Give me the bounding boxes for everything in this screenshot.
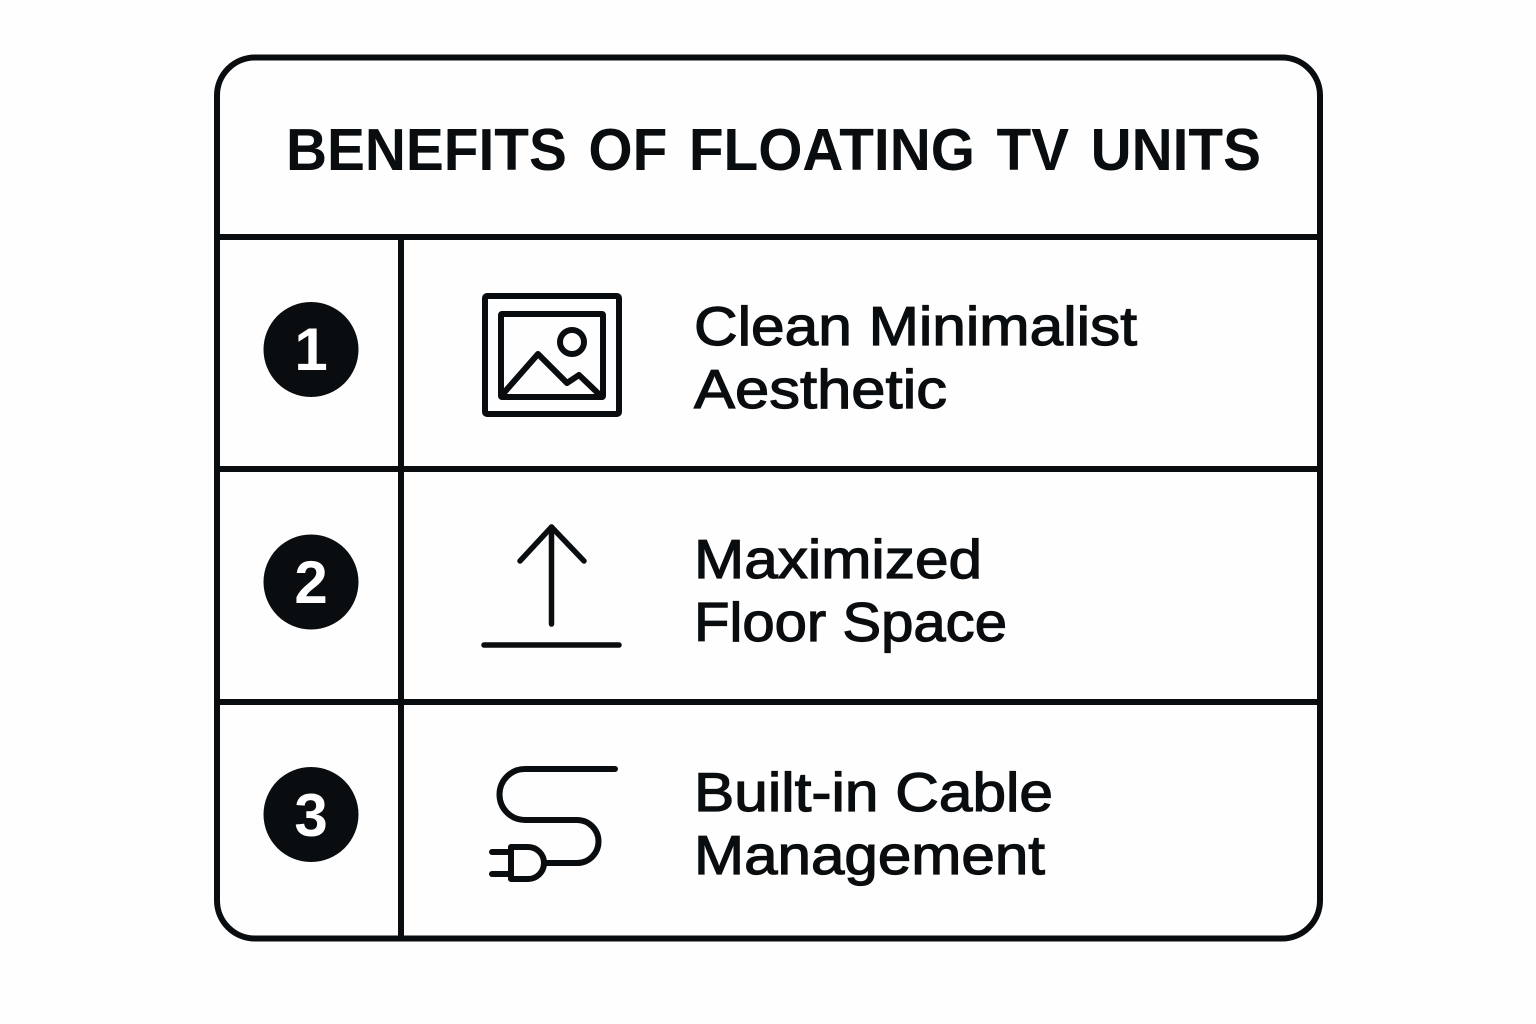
title: BENEFITS OF FLOATING TV UNITS (286, 117, 1261, 183)
icon: cable and plug (492, 769, 615, 879)
number badge 3 (264, 767, 358, 862)
number badge 1: 1 (294, 316, 328, 383)
label: clean minimalist aesthetic: Clean Minimalist (694, 295, 1137, 357)
panel: table frame (217, 58, 1320, 938)
label: built-in cable management (694, 761, 1053, 886)
row 3: built-in cable management (264, 761, 1053, 886)
number badge 2: 2 (294, 549, 328, 616)
label: maximized floor space (694, 528, 1007, 653)
icon: up arrow above floor line (484, 527, 619, 645)
number badge 2 (264, 534, 358, 630)
label: built-in cable management: Built-in Cable (694, 761, 1053, 823)
label: clean minimalist aesthetic (694, 295, 1137, 420)
number badge 3: 3 (294, 782, 328, 849)
label: built-in cable management: Management (694, 824, 1045, 886)
label: maximized floor space: Floor Space (694, 591, 1007, 653)
label: clean minimalist aesthetic: Aesthetic (694, 358, 947, 420)
icon: framed picture (485, 296, 619, 414)
row 1: clean minimalist aesthetic (264, 295, 1137, 420)
row 2: maximized floor space (264, 527, 1007, 653)
label: maximized floor space: Maximized (694, 528, 982, 590)
number badge 1 (264, 302, 358, 397)
